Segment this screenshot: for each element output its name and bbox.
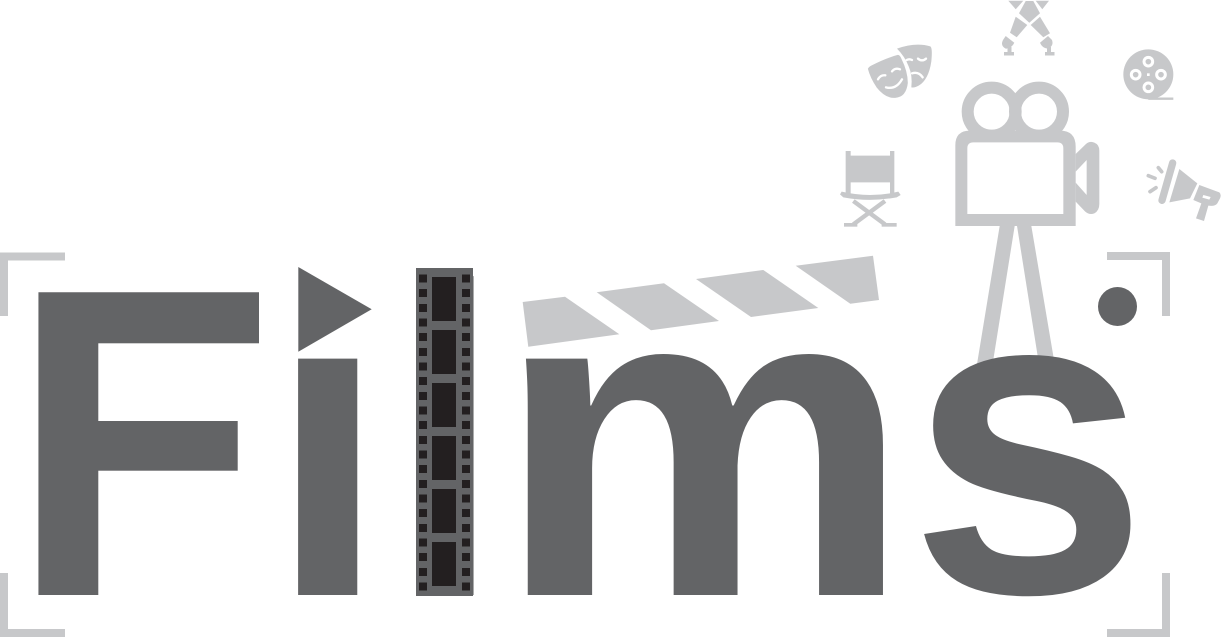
icon: tripod legs [977, 226, 1054, 364]
corner bracket: bottom left [4, 573, 65, 633]
F letter crossbar trim [97, 288, 269, 601]
corner bracket: bottom right [1107, 573, 1166, 633]
icon: director chair [840, 151, 901, 227]
corner bracket: top right [1107, 256, 1166, 316]
title: Films wordmark [9, 191, 1148, 638]
icon: theatre masks [867, 45, 932, 99]
corner bracket: top left [4, 256, 65, 316]
icon: crossed spotlights [1002, 1, 1054, 55]
icon: play triangle [298, 267, 372, 352]
mask over i dot [285, 262, 375, 354]
icon: movie camera [955, 88, 1099, 226]
dot [1098, 287, 1137, 326]
icon: film reel [1123, 49, 1173, 99]
icon: film strip [416, 268, 473, 596]
icon: megaphone [1148, 163, 1221, 221]
icon: clapperboard stripes [523, 256, 879, 347]
